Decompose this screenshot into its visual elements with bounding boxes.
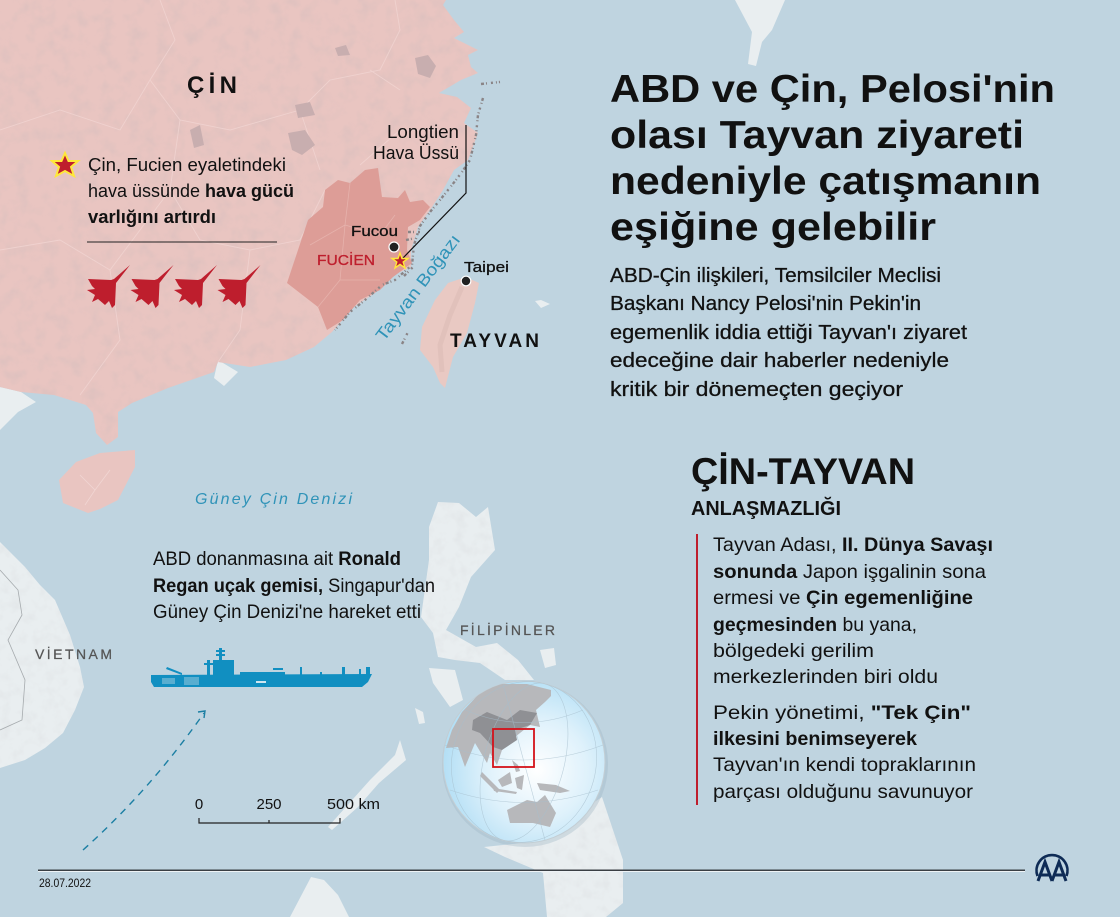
land: Taiwan (420, 277, 479, 388)
globe: Australia (507, 795, 556, 827)
globe: highlight rectangle (493, 729, 534, 767)
text block: history (713, 534, 993, 688)
heading: China-Taiwan dispute (691, 451, 915, 520)
text block: history: merkezlerinden biri oldu (713, 666, 938, 688)
title: olası Tayvan ziyareti (610, 114, 1024, 157)
leader line (403, 125, 466, 258)
logo: AA (1036, 855, 1068, 881)
intro paragraph (610, 264, 967, 401)
scale bar: 250 (256, 796, 282, 813)
callout: aircraft carrier (153, 549, 435, 623)
heading: China-Taiwan dispute: ÇİN-TAYVAN (691, 451, 915, 492)
label: South China Sea: Güney Çin Denizi (195, 491, 352, 508)
text block: One China: Tayvan'ın kendi topraklarının (713, 754, 976, 776)
land: minor island (535, 300, 550, 308)
title (610, 68, 1055, 249)
land texture: neighbours (0, 502, 623, 917)
land: Palawan (328, 740, 406, 830)
intro paragraph: kritik bir dönemeçten geçiyor (610, 378, 903, 401)
intro paragraph: Başkanı Nancy Pelosi'nin Pekin'in (610, 292, 921, 315)
land: Visayas (540, 648, 556, 668)
scale bar (195, 796, 380, 823)
land: small island (415, 708, 425, 724)
heading: China-Taiwan dispute: ANLAŞMAZLIĞI (691, 496, 841, 520)
icons: fighter jets (87, 265, 260, 308)
text block: One China: Pekin yönetimi, "Tek Çin" (713, 702, 971, 724)
title: eşiğine gelebilir (610, 206, 936, 249)
callout: aircraft carrier: ABD donanmasına ait Ronald (153, 549, 401, 570)
text block: history: Tayvan Adası, II. Dünya Savaşı (713, 534, 993, 556)
arrow: carrier route (83, 711, 205, 850)
globe: Indonesia (480, 760, 570, 794)
intro paragraph: edeceğine dair haberler nedeniyle (610, 349, 949, 372)
globe: grid (445, 682, 603, 842)
label: Vietnam: VİETNAM (35, 645, 112, 662)
map: Fujian province (287, 168, 430, 330)
marker: Taipei: Taipei (464, 259, 509, 276)
label: Fujian: FUCİEN (317, 251, 375, 269)
label: Philippines: FİLİPİNLER (460, 621, 555, 638)
scale bar: 0 (195, 796, 203, 813)
intro paragraph: ABD-Çin ilişkileri, Temsilciler Meclisi (610, 264, 941, 287)
label: China: ÇİN (187, 72, 237, 99)
date: 28.07.2022 (39, 876, 91, 890)
text block: One China: ilkesini benimseyerek (713, 728, 917, 750)
text block: One China (713, 702, 976, 803)
label: Longtien Air Base: Hava Üssü (373, 142, 459, 163)
text block: history: bölgedeki gerilim (713, 640, 874, 662)
text block: One China: parçası olduğunu savunuyor (713, 781, 974, 803)
icon: base star (392, 253, 408, 268)
side rule (696, 534, 698, 805)
land texture: China (0, 0, 478, 445)
title: nedeniyle çatışmanın (610, 160, 1041, 203)
map: China mainland (0, 0, 478, 445)
label: Taiwan: TAYVAN (450, 331, 539, 352)
marker: Taipei (461, 259, 509, 286)
land: Japan fragment (735, 0, 785, 66)
callout text: Çin, Fucien eyaletindeki (88, 154, 286, 175)
callout text line 3: varlığını artırdı (88, 206, 216, 227)
text block: history: geçmesinden bu yana, (713, 614, 917, 636)
scale bar: 500 km (327, 796, 380, 813)
lakes (190, 45, 436, 155)
map: neighbouring land (0, 0, 785, 917)
land: Mindoro (429, 668, 463, 707)
land: northern Vietnam corner (0, 387, 36, 430)
label: Longtien Air Base: Longtien (387, 121, 459, 142)
text block: history: ermesi ve Çin egemenliğine (713, 587, 973, 609)
marker: Fuzhou: Fucou (351, 223, 398, 240)
text block: history: sonunda Japon işgalinin sona (713, 561, 986, 583)
globe locator (442, 680, 608, 847)
icon: aircraft carrier (151, 648, 372, 687)
land: Vietnam (0, 542, 84, 768)
callout text line 2: hava üssünde hava gücü (88, 180, 294, 201)
callout: aircraft carrier: Regan uçak gemisi, Singapur'dan (153, 576, 435, 597)
land: Borneo (290, 877, 349, 917)
globe: China (472, 710, 537, 750)
Vietnam border lines (0, 570, 25, 730)
land: Luzon (421, 502, 534, 680)
label: Taiwan Strait: Tayvan Boğazı (372, 231, 464, 344)
label: Longtien Air Base (373, 121, 459, 163)
globe: Asia (446, 684, 551, 767)
title: ABD ve Çin, Pelosi'nin (610, 68, 1055, 111)
land: Pearl River delta (214, 360, 238, 386)
icon: star (52, 153, 78, 176)
province lines (0, 0, 440, 395)
intro paragraph: egemenlik iddia ettiği Tayvan'ı ziyaret (610, 321, 967, 344)
land: Mindanao and Visayas (484, 797, 623, 917)
callout: air base presence (52, 153, 294, 308)
coastal islets (335, 82, 500, 344)
callout: aircraft carrier: Güney Çin Denizi'ne hareket etti (153, 602, 421, 623)
footer rule (38, 870, 1025, 872)
land: Hainan (59, 450, 135, 513)
marker: Fuzhou (351, 223, 399, 252)
